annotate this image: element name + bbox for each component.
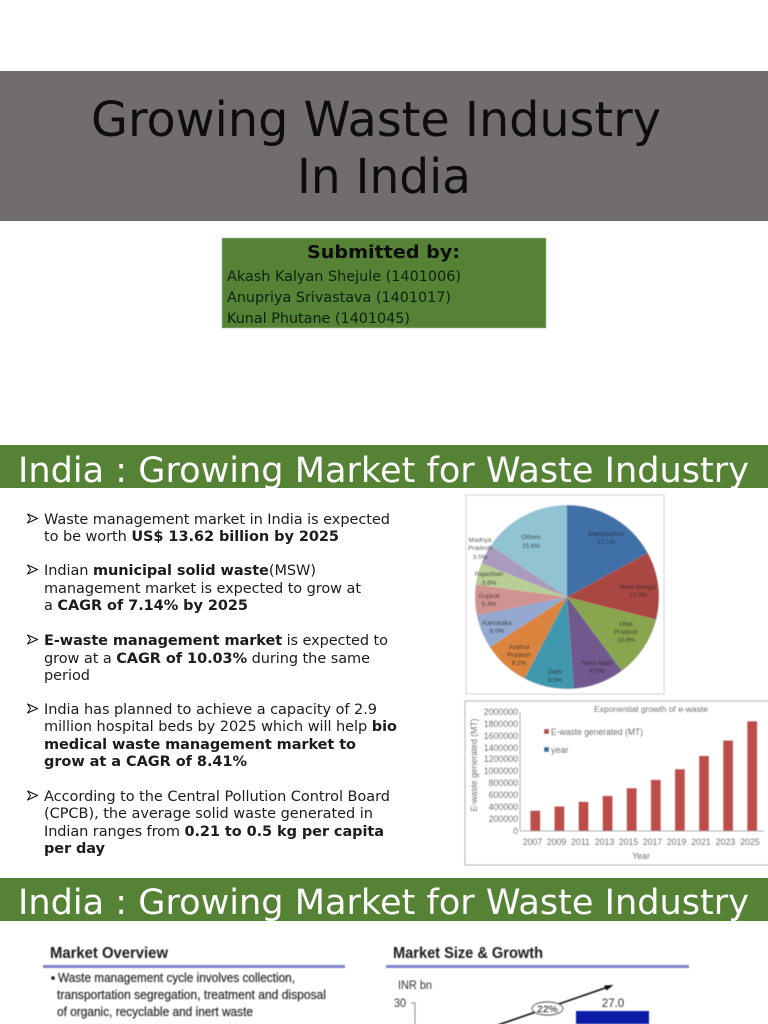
chart axis labels: INR bn <box>398 980 432 992</box>
section heading: growing market 2: India : Growing Market for Waste Industry <box>18 883 749 923</box>
x axis labels: 2009 <box>547 837 566 847</box>
author names: Anupriya Srivastava (1401017) <box>227 290 451 306</box>
bullet: municipal solid waste: management market is expected to grow at <box>44 581 361 597</box>
pie labels: Madhya <box>469 537 492 544</box>
chart axis labels: 30 <box>394 998 406 1010</box>
legend: E-waste generated (MT) <box>551 727 643 737</box>
bullet: CPCB: According to the Central Pollution Control Board <box>44 789 390 805</box>
overview text: transportation segregation, treatment and disposal <box>57 988 326 1002</box>
y axis labels: 0 <box>513 826 518 836</box>
bars <box>530 721 757 831</box>
author names: Akash Kalyan Shejule (1401006) <box>227 269 461 285</box>
title <box>91 92 661 205</box>
y axis title: E-waste generated (MT) <box>469 718 479 812</box>
pie labels: 3.8% <box>482 580 497 587</box>
pie labels: Maharashtra <box>588 531 624 538</box>
pie labels: 6.0% <box>490 628 505 635</box>
panel: market size and growth <box>386 945 689 1024</box>
pie labels <box>468 531 656 684</box>
pie labels: Others <box>521 534 541 541</box>
bullet: e-waste: period <box>44 668 90 684</box>
x axis labels: 2023 <box>716 837 735 847</box>
title banner <box>0 71 768 221</box>
bullet: hospital beds: India has planned to achieve a capacity of 2.9 <box>44 702 377 718</box>
y axis labels: 400000 <box>489 802 518 812</box>
bullet: market worth: to be worth US$ 13.62 billion by 2025 <box>44 529 339 545</box>
bullet: municipal solid waste: Indian municipal solid waste(MSW) <box>44 563 316 579</box>
x axis labels: 2011 <box>571 837 590 847</box>
pie labels: Gujarat <box>479 593 500 600</box>
pie labels: Pradesh <box>614 629 638 636</box>
bullet: municipal solid waste: a CAGR of 7.14% by 2025 <box>44 598 248 614</box>
chart axis <box>411 1003 415 1024</box>
bullet: e-waste: E-waste management market is expected to <box>44 633 388 649</box>
panel: market overview: Market Overview <box>50 945 169 962</box>
pie labels: 17.1% <box>597 539 615 546</box>
bullet: e-waste <box>28 633 388 684</box>
pie slices <box>521 551 613 643</box>
bullet: CPCB: (CPCB), the average solid waste generated in <box>44 806 373 822</box>
y axis labels <box>484 707 518 836</box>
title: Growing Waste Industry <box>91 92 661 148</box>
bullet: hospital beds <box>28 702 397 770</box>
bullet: CPCB <box>28 789 390 857</box>
pie labels: 12.0% <box>629 592 647 599</box>
pie labels: Uttar <box>619 621 634 628</box>
overview text <box>51 971 326 1019</box>
pie labels: 9.0% <box>590 668 605 675</box>
y axis labels: 1600000 <box>484 731 518 741</box>
legend <box>544 727 643 755</box>
section heading: growing market 1: India : Growing Market for Waste Industry <box>18 451 749 491</box>
x axis labels: 2015 <box>619 837 638 847</box>
submitted by box <box>222 238 546 328</box>
x axis labels: 2007 <box>523 837 542 847</box>
pie labels: Karnataka <box>482 620 512 627</box>
bullet: market worth <box>28 512 390 545</box>
pie labels: 8.2% <box>512 660 527 667</box>
x axis title: Year <box>632 851 650 861</box>
x axis labels: 2021 <box>691 837 711 847</box>
chart axis labels <box>394 980 432 1010</box>
y axis labels: 1000000 <box>484 766 518 776</box>
bullet: hospital beds: grow at a CAGR of 8.41% <box>44 754 247 770</box>
overview text: of organic, recyclable and inert waste <box>57 1005 253 1019</box>
x axis labels: 2013 <box>595 837 614 847</box>
pie labels: West Bengal <box>620 584 656 591</box>
pie labels: Pradesh <box>507 652 531 659</box>
pie labels: 15.6% <box>522 543 540 550</box>
bar chart: exponential growth of e-waste <box>465 701 768 865</box>
bullet: hospital beds: million hospital beds by 2025 which will help bio <box>44 719 397 735</box>
legend: year <box>551 745 569 755</box>
y axis labels: 1400000 <box>484 743 518 753</box>
growth arrow <box>498 985 614 1024</box>
y axis labels: 1800000 <box>484 719 518 729</box>
panel: market overview <box>43 945 345 1019</box>
bullet: e-waste: grow at a CAGR of 10.03% during the same <box>44 651 370 667</box>
author names <box>227 269 461 327</box>
overview text: Waste management cycle involves collection, <box>58 971 295 985</box>
author names: Kunal Phutane (1401045) <box>227 311 410 327</box>
pie labels: Delhi <box>548 669 562 676</box>
x axis labels: 2019 <box>667 837 686 847</box>
bullet list <box>28 512 397 857</box>
axes <box>520 712 764 831</box>
chart title: Exponential growth of e-waste <box>594 704 708 714</box>
x axis labels <box>523 837 760 847</box>
title: In India <box>297 149 471 205</box>
bullet: CPCB: per day <box>44 841 106 857</box>
submitted by box: Submitted by: <box>307 242 460 263</box>
pie labels: Tamil Nadu <box>581 660 613 667</box>
pie labels: 8.9% <box>548 677 563 684</box>
bullet: CPCB: Indian ranges from 0.21 to 0.5 kg per capita <box>44 824 384 840</box>
bullet: municipal solid waste <box>28 563 361 614</box>
y axis labels: 200000 <box>489 814 518 824</box>
pie labels: Pradesh <box>468 545 492 552</box>
bar: 27.0: 27.0 <box>602 998 624 1010</box>
y axis labels: 2000000 <box>484 707 518 717</box>
y axis labels: 1200000 <box>484 754 518 764</box>
y axis labels: 800000 <box>489 778 518 788</box>
pie labels: 5.4% <box>482 601 497 608</box>
x axis labels: 2025 <box>740 837 760 847</box>
y axis labels: 600000 <box>489 790 518 800</box>
panel: market size and growth: Market Size & Growth <box>393 945 543 962</box>
growth arrow: 22% <box>537 1004 559 1016</box>
pie chart: e-waste by state <box>466 495 664 694</box>
bar: 27.0 <box>576 998 649 1024</box>
bullet: hospital beds: medical waste management market to <box>44 737 356 753</box>
pie labels: 3.5% <box>473 554 488 561</box>
pie labels: 10.9% <box>617 637 635 644</box>
bullet: market worth: Waste management market in India is expected <box>44 512 390 528</box>
x axis labels: 2017 <box>643 837 662 847</box>
pie labels: Rajasthan <box>475 571 504 578</box>
pie labels: Andhra <box>509 644 530 651</box>
